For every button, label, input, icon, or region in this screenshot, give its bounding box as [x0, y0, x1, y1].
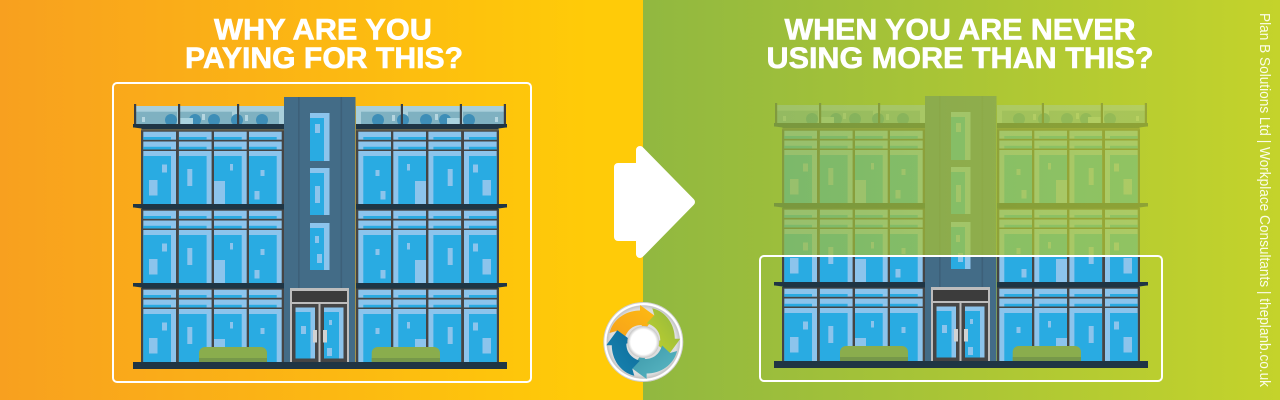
frame: ground floor highlighted — [760, 256, 1162, 381]
fade overlay on unused floors — [760, 90, 1162, 256]
arrow: pointing right — [618, 150, 691, 254]
entrance doors — [290, 288, 349, 362]
left wing of building — [133, 104, 284, 363]
logo: circular arrows — [604, 302, 683, 382]
background: orange panel — [0, 0, 643, 400]
heading: why are you paying for this — [185, 14, 463, 75]
background: green panel — [643, 0, 1280, 400]
heading: why are you paying for this: PAYING FOR THIS? — [185, 42, 463, 75]
frame: whole building highlighted — [113, 83, 531, 382]
central tower — [284, 97, 356, 362]
heading: when you are never using more than this — [766, 14, 1154, 75]
heading: when you are never using more than this: WHEN YOU ARE NEVER — [784, 14, 1136, 47]
building: full office block — [133, 97, 507, 369]
logo arrow: green — [647, 308, 680, 354]
heading: when you are never using more than this: USING MORE THAN THIS? — [766, 42, 1154, 75]
planter bushes — [199, 347, 440, 362]
logo arrow: teal — [632, 346, 677, 379]
logo centre — [627, 326, 659, 358]
ground slab — [133, 362, 507, 369]
building copy — [774, 96, 1148, 368]
right wing of building — [356, 104, 507, 363]
logo arrow: orange — [610, 305, 655, 338]
building: faded copy with only ground floor in use — [760, 90, 1162, 368]
heading: why are you paying for this: WHY ARE YOU — [214, 14, 432, 47]
logo arrow: blue — [606, 330, 640, 376]
